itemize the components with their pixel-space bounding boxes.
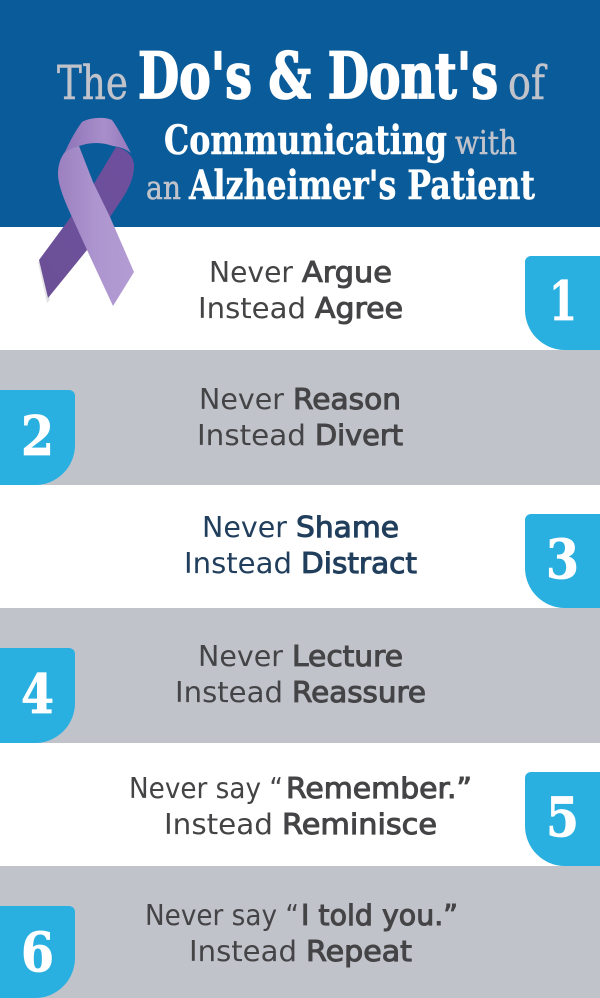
badge 3: 3 <box>546 527 579 591</box>
row 1 text: Argue <box>302 256 392 289</box>
row 5 background <box>0 743 600 866</box>
badge 1 <box>525 256 600 350</box>
row 1 background <box>0 227 600 350</box>
row 6 background <box>0 866 600 998</box>
row 2 text: Reason <box>293 383 401 416</box>
badge 4: 4 <box>21 662 54 726</box>
row 4 text <box>175 640 426 709</box>
title: The <box>57 56 128 111</box>
row 3 text: Distract <box>301 547 417 580</box>
row 6 text: I told you.” <box>301 899 458 932</box>
badge 2: 2 <box>21 404 54 468</box>
row 4 background <box>0 608 600 743</box>
row 4 text: Never <box>198 640 283 673</box>
row 2 text: Never <box>199 383 284 416</box>
row 5 text: Remember.” <box>286 772 472 805</box>
row 1 text: Never <box>209 256 293 289</box>
row 4 text: Lecture <box>292 640 403 673</box>
row 2 text <box>197 383 403 452</box>
row 4 text: Instead <box>175 676 283 709</box>
row 1 text: Instead <box>198 292 306 325</box>
title: Communicating <box>164 117 447 164</box>
header band <box>0 0 600 227</box>
badge 2 <box>0 390 75 485</box>
badge 5: 5 <box>546 785 579 849</box>
title: with <box>455 123 517 162</box>
row 5 text: Reminisce <box>282 808 437 841</box>
badge 5 <box>525 772 600 866</box>
row 1 text: Agree <box>315 292 403 325</box>
badge 6: 6 <box>21 920 54 984</box>
badge 3 <box>525 514 600 608</box>
row 6 text: Repeat <box>306 935 412 968</box>
row 5 text <box>129 772 472 841</box>
row 3 text: Shame <box>296 511 399 544</box>
row 6 text: Instead <box>189 935 297 968</box>
row 2 text: Instead <box>197 419 306 452</box>
title: an <box>146 168 181 207</box>
title <box>57 39 548 209</box>
title: of <box>508 56 548 111</box>
badge 4 <box>0 648 75 743</box>
row 2 text: Divert <box>315 419 403 452</box>
icon: purple awareness ribbon <box>38 118 134 306</box>
row 3 text: Instead <box>184 547 292 580</box>
row 3 text: Never <box>202 511 287 544</box>
row 3 background <box>0 485 600 608</box>
row 4 text: Reassure <box>292 676 426 709</box>
row 3 text <box>184 511 417 580</box>
row 6 text <box>145 899 458 968</box>
badge 6 <box>0 906 75 998</box>
row 5 text: Instead <box>164 808 273 841</box>
badge 1: 1 <box>549 269 577 333</box>
row 5 text: Never say “ <box>129 772 283 805</box>
row 2 background <box>0 350 600 485</box>
row 1 text <box>198 256 403 325</box>
row 6 text: Never say “ <box>145 899 299 932</box>
